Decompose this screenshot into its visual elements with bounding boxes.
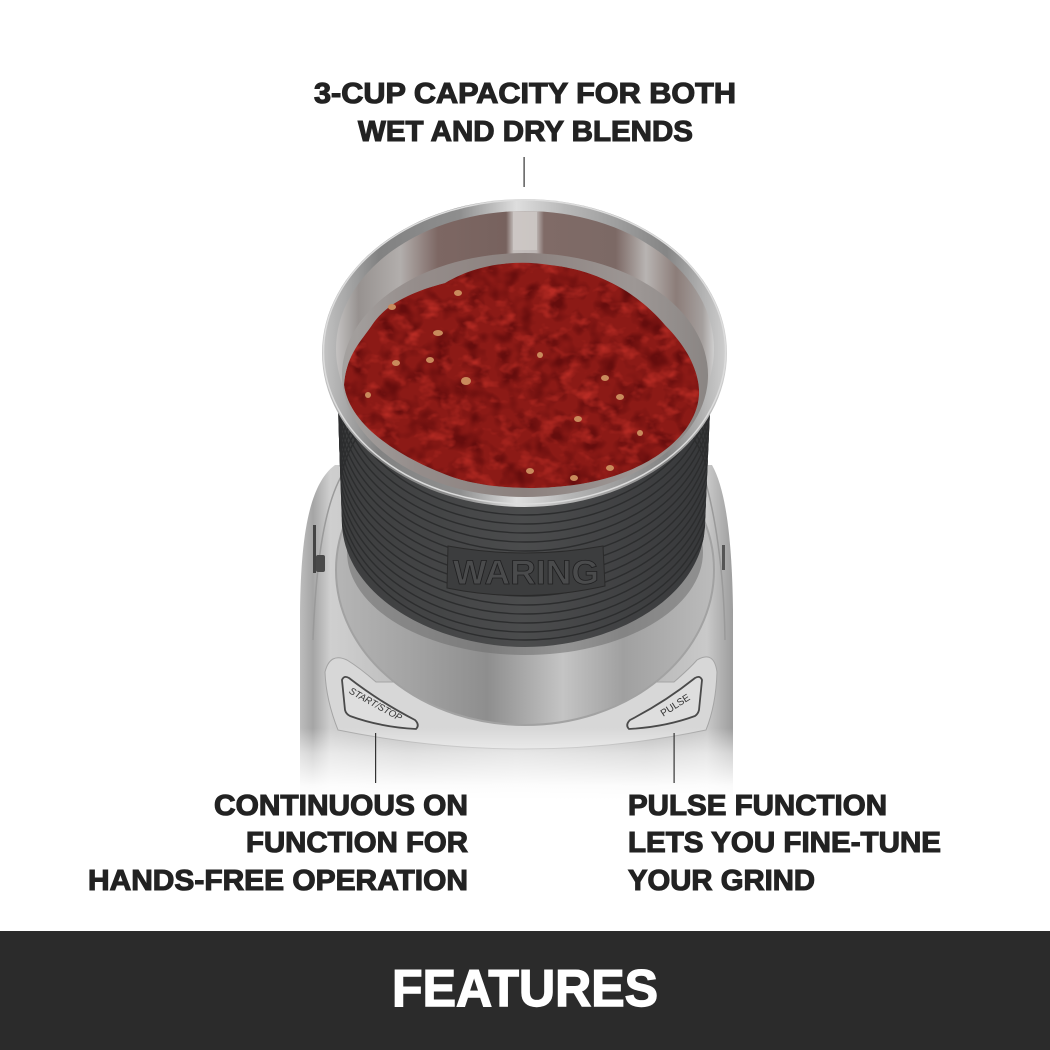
callout: continuous on function: FUNCTION FOR xyxy=(246,827,468,859)
round platform disc xyxy=(336,415,714,725)
leader line: capacity xyxy=(524,157,525,187)
start/stop button: START/STOP xyxy=(347,686,404,724)
sleeve ribs xyxy=(338,414,710,641)
title callout: capacity xyxy=(314,78,736,148)
start/stop button xyxy=(342,677,418,729)
footer heading: FEATURES xyxy=(392,960,658,1018)
central reflection xyxy=(513,212,537,250)
rim highlight xyxy=(324,200,726,504)
leader line: start/stop xyxy=(375,733,376,783)
platform contact shadow xyxy=(347,449,703,655)
right notch xyxy=(722,545,725,570)
callout: continuous on function: CONTINUOUS ON xyxy=(214,790,468,822)
inner step ring xyxy=(342,253,708,497)
callout: pulse function: PULSE FUNCTION xyxy=(628,790,887,822)
stainless steel cup rim xyxy=(322,199,727,507)
callout: continuous on function: HANDS-FREE OPERATION xyxy=(88,865,468,897)
black ribbed cup sleeve xyxy=(338,413,710,647)
red sauce xyxy=(344,263,699,488)
left notch xyxy=(313,525,325,573)
lower control band with button panels xyxy=(325,657,717,749)
callout: pulse function xyxy=(628,790,941,897)
pulse button: PULSE xyxy=(659,692,693,719)
base fade to white xyxy=(285,728,750,800)
callout: continuous on function xyxy=(88,790,468,897)
base housing xyxy=(300,465,733,800)
pulse button xyxy=(627,677,702,729)
callout: pulse function: YOUR GRIND xyxy=(628,865,815,897)
logo text: WARING xyxy=(453,554,599,592)
title callout: capacity: 3-CUP CAPACITY FOR BOTH xyxy=(314,78,736,110)
sauce body xyxy=(344,263,699,488)
base shoulder line xyxy=(313,470,725,640)
sauce seeds xyxy=(365,290,643,481)
callout: pulse function: LETS YOU FINE-TUNE xyxy=(628,827,941,859)
title callout: capacity: WET AND DRY BLENDS xyxy=(358,116,693,148)
inner wall xyxy=(336,211,714,487)
footer banner xyxy=(0,931,1050,1050)
outer rim xyxy=(322,199,727,507)
logo plate xyxy=(447,546,605,596)
leader line: pulse xyxy=(674,733,675,783)
blender base and controls xyxy=(285,415,750,800)
